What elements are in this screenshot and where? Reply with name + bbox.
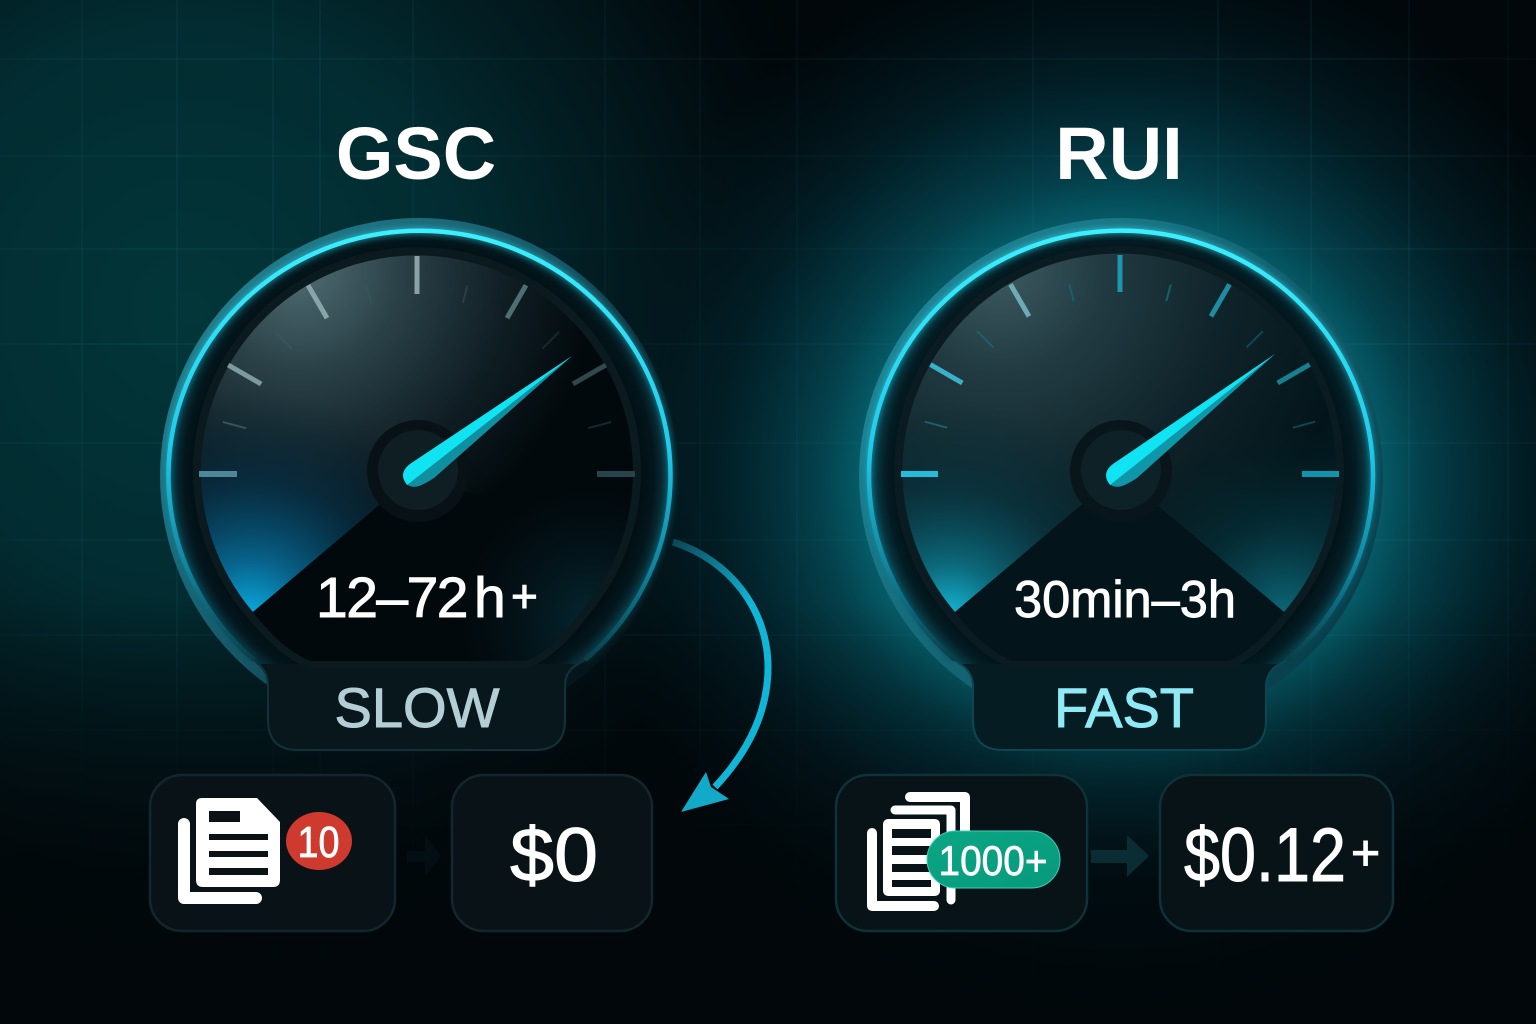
card: pages RUI [836,775,1087,931]
icon: documents [184,798,280,898]
gauge outer band [160,218,678,734]
time range: + [511,570,536,622]
dial plate [894,246,1344,668]
gauge body with label tab [169,231,670,750]
title: GSC: GSC [336,112,496,195]
hub [367,420,469,522]
card: cost RUI [1160,775,1393,931]
label tab fill [260,664,575,749]
icon: document stack [872,797,965,906]
hub [1070,420,1172,522]
time range: 12–72 [316,566,467,630]
curved arrow [673,542,768,812]
gauge: RUI [859,218,1383,750]
gauge body with label tab [869,231,1373,750]
card: cost GSC: $0 [510,813,598,898]
card: pages GSC [150,775,395,931]
dial face [902,254,1334,661]
gauge outer band [859,218,1383,734]
ticks [901,255,1339,474]
dial face [201,256,633,661]
time range: h [474,566,504,630]
cyan ring [169,231,670,660]
speed label: SLOW [335,676,500,739]
arrow: pages to cost RUI [1091,835,1149,877]
dial plate [193,247,641,668]
card: cost RUI: + [1351,825,1380,881]
badge: 1000+: 1000+ [938,837,1048,884]
cyan ring [869,231,1373,660]
card: cost GSC [452,775,652,931]
ticks [199,256,635,474]
arrow: pages to cost GSC [407,835,441,877]
card: cost RUI: $0.12 [1184,813,1346,898]
badge: 10 [286,812,352,870]
badge: 10: 10 [298,818,340,867]
speed label: FAST [1054,676,1194,739]
gauge: GSC [160,218,678,750]
needle [1106,354,1275,487]
title: RUI: RUI [1055,112,1183,195]
needle [403,356,572,487]
label tab fill [962,664,1277,749]
time range: 30min–3h [1014,571,1236,629]
